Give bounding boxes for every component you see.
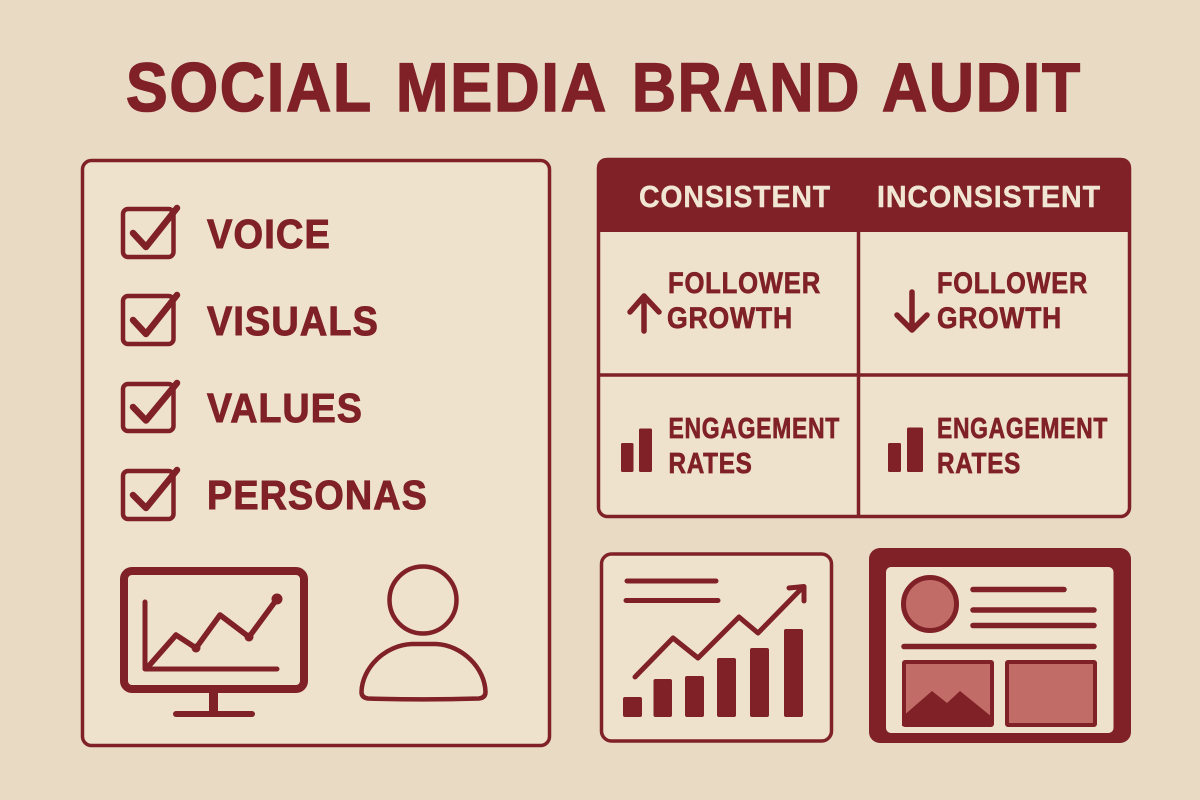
icon: person (362, 566, 486, 699)
icon: monitor with line chart (124, 571, 304, 714)
cell: inconsistent engagement rates: RATES (937, 448, 1021, 480)
cell: consistent engagement rates (621, 413, 840, 480)
cell: consistent follower growth (630, 267, 821, 335)
checklist item: personas: PERSONAS (207, 472, 428, 518)
cell: inconsistent follower growth (897, 267, 1088, 335)
table header (597, 158, 1131, 232)
checklist item: personas (123, 470, 428, 519)
cell: consistent follower growth: GROWTH (667, 302, 793, 335)
table grid lines (598, 232, 1130, 517)
table header: CONSISTENT (639, 179, 831, 214)
title: MEDIA (396, 49, 608, 126)
panel: consistent vs inconsistent table (597, 158, 1131, 517)
cell: consistent follower growth: FOLLOWER (668, 267, 821, 300)
cell: inconsistent follower growth: FOLLOWER (937, 267, 1088, 300)
panel: brand checklist (82, 160, 550, 746)
title (126, 49, 1082, 126)
panel: profile page card (869, 548, 1131, 743)
image placeholder with mountains (902, 662, 992, 726)
panel: growth chart card (602, 554, 832, 741)
image placeholder (1007, 662, 1095, 725)
checklist item: values: VALUES (207, 385, 363, 431)
checklist item: voice (123, 208, 331, 257)
table header: INCONSISTENT (877, 179, 1101, 214)
bar chart (623, 629, 803, 717)
checklist item: voice: VOICE (207, 211, 331, 257)
cell: inconsistent engagement rates (888, 413, 1108, 480)
checklist item: visuals (123, 295, 379, 344)
cell: inconsistent engagement rates: ENGAGEMENT (937, 413, 1108, 445)
text placeholder lines (626, 581, 718, 600)
checklist item: values (123, 383, 363, 431)
cell: inconsistent follower growth: GROWTH (937, 302, 1062, 335)
checklist item: visuals: VISUALS (207, 298, 379, 344)
title: BRAND (632, 49, 861, 126)
cell: consistent engagement rates: RATES (668, 448, 752, 480)
arrow: rising trend line (635, 586, 804, 677)
profile text lines (904, 590, 1094, 646)
avatar circle (904, 578, 956, 630)
title: AUDIT (882, 49, 1082, 126)
title: SOCIAL (126, 49, 373, 126)
cell: consistent engagement rates: ENGAGEMENT (668, 413, 840, 445)
